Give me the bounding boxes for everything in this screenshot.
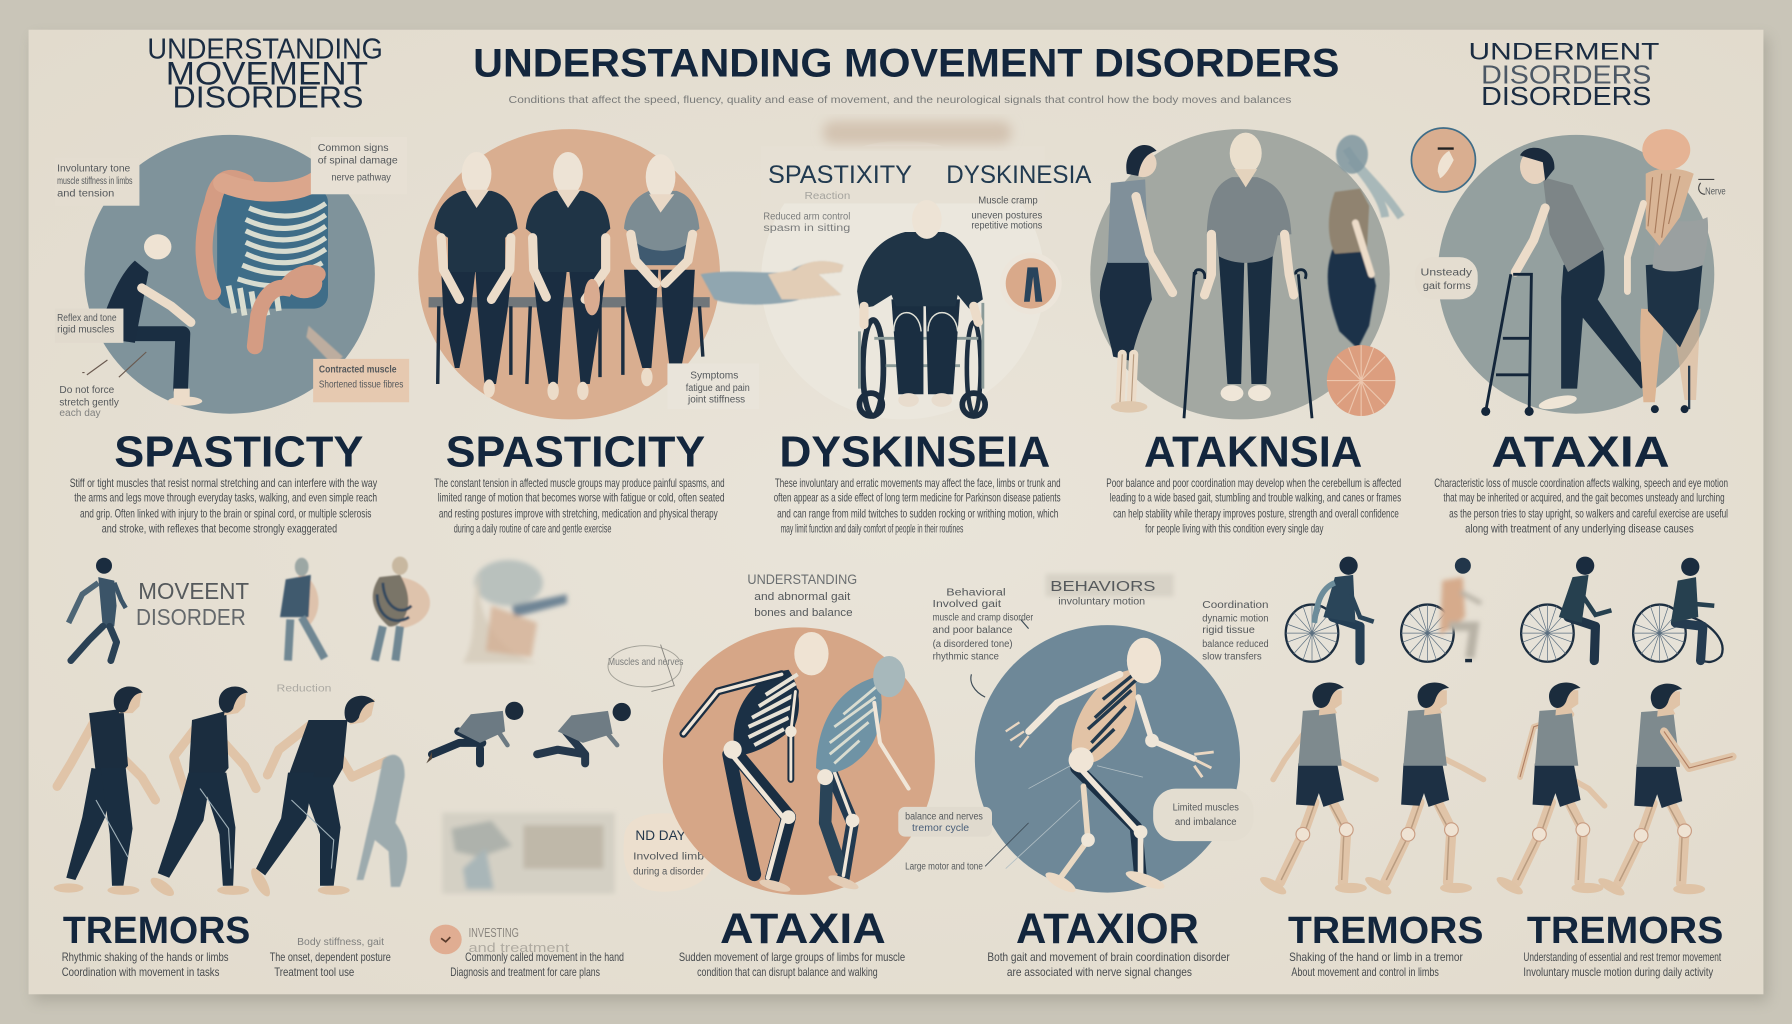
text: ataxior description: Both gait and movement of brain coordination disorder <box>987 950 1230 964</box>
callout: no day: Involved limb <box>633 851 704 862</box>
text: third description <box>450 950 624 979</box>
panel: walker circle <box>1438 129 1714 416</box>
note block: behaviours left: muscle and cramp disorder <box>933 613 1034 624</box>
figure: center person with canes <box>1184 133 1312 418</box>
small faded caption: Reduction <box>277 683 332 694</box>
text: understanding callout: and abnormal gait <box>754 591 851 603</box>
heading: spastixity: SPASTIXITY <box>768 161 912 189</box>
row one headings: ATAKNSIA <box>1144 428 1362 476</box>
subtitle line: Conditions that affect the speed, fluency, quality and ease of movement, and the neurological signals that control how the body moves and balances <box>509 95 1291 106</box>
row one headings: ATAXIA <box>1491 428 1670 476</box>
figure: faded right person <box>1328 135 1401 349</box>
text: tremors second description: Shaking of the hand or limb in a tremor <box>1289 950 1463 964</box>
row two heading: ataxior: ATAXIOR <box>1016 905 1199 952</box>
row one headings: SPASTICTY <box>114 428 363 476</box>
note block: behaviours left: (a disordered tone) <box>933 639 1013 650</box>
note block: behaviours centre <box>1046 574 1174 608</box>
text: ataxia lower description: Sudden movement of large groups of limbs for muscle <box>679 950 905 964</box>
figure: runner one <box>54 686 155 895</box>
callout: upper left label: and tension <box>57 189 115 200</box>
text: dyskinesia description <box>774 476 1061 536</box>
main title: UNDERSTANDING MOVEMENT DISORDERS <box>473 42 1339 86</box>
callout: skeleton left pill: balance and nerves <box>905 811 983 822</box>
callout: skeleton left pill <box>898 807 992 837</box>
note: skeleton lower left <box>905 823 1029 873</box>
text: understanding callout: UNDERSTANDING <box>747 572 857 587</box>
panel: skeleton circle slate <box>975 625 1240 896</box>
row two heading: tremors third: TREMORS <box>1527 909 1723 951</box>
callout: seated group note: fatigue and pain <box>686 383 750 394</box>
callout: pill label: gait forms <box>1423 281 1471 292</box>
text: tremors second description: About movement and control in limbs <box>1291 965 1439 979</box>
note: skeleton lower left: Large motor and tone <box>905 862 983 873</box>
note block: behaviours right: balance reduced <box>1202 639 1269 650</box>
callout: peach note: Contracted muscle <box>319 365 397 376</box>
figure: seated person two <box>526 152 610 400</box>
note right: repetitive motions <box>971 221 1042 232</box>
callout: skeleton right pill <box>1153 789 1254 841</box>
callout: no day: ND DAY <box>635 828 686 843</box>
row two heading: tremors: TREMORS <box>63 909 250 951</box>
figure: walker three <box>1494 682 1605 898</box>
figure: wheel person two <box>1401 558 1481 662</box>
callout: upper right label: of spinal damage <box>318 155 398 166</box>
callout: upper right label <box>311 137 407 194</box>
row one headings: SPASTICITY <box>446 428 705 476</box>
note block: behaviours left: Behavioral <box>946 587 1006 598</box>
text: understanding callout: bones and balance <box>754 607 853 619</box>
top right heading: DISORDERS <box>1481 59 1651 89</box>
text: middle description: Treatment tool use <box>274 965 355 979</box>
note right: uneven postures <box>971 210 1042 221</box>
text: ataksia description: Poor balance and poor coordination may develop when the cerebellum is affected <box>1106 476 1401 490</box>
text: ataxior description: are associated with nerve signal changes <box>1007 965 1192 979</box>
text: ataxia lower description: condition that can disrupt balance and walking <box>697 965 878 979</box>
faded small hand icon <box>306 326 343 366</box>
note block: behaviours left <box>933 587 1034 697</box>
top right heading: DISORDERS <box>1481 81 1651 111</box>
callout: seated group note: joint stiffness <box>687 394 745 405</box>
icon: small circle inset <box>1411 128 1475 192</box>
panel: cane circle <box>1090 129 1401 419</box>
callout: arc note <box>608 645 683 691</box>
callout: upper right label: nerve pathway <box>331 173 392 184</box>
text: tremors description: Coordination with movement in tasks <box>62 965 219 979</box>
faded pill decoration <box>823 121 1011 144</box>
text: spasticity description two: limited range of motion that becomes worse with fatigue or cold, often seated <box>438 491 725 505</box>
bench <box>429 297 710 384</box>
text: tremors third description: Involuntary muscle motion during daily activity <box>1523 965 1713 979</box>
text: spasticity description two <box>434 476 725 536</box>
text: ataksia description: for people living with this condition every single day <box>1145 522 1323 536</box>
icon: peach striped disc <box>1327 345 1395 416</box>
figure: runner three <box>248 696 386 899</box>
callout: no day <box>623 813 714 892</box>
note block: behaviours right: slow transfers <box>1202 651 1262 662</box>
anatomy: intestines and ribs <box>204 178 328 346</box>
callout: lower left label: each day <box>59 408 101 419</box>
text: spasticity description two: during a daily routine of care and gentle exercise <box>454 522 612 536</box>
callout: upper left label <box>55 158 139 206</box>
text: moveent disorder: DISORDER <box>136 604 246 630</box>
note block: behaviours right <box>1202 600 1269 662</box>
callout: seated group note <box>667 363 759 409</box>
row two heading: ataxia: ATAXIA <box>720 905 886 952</box>
text: spasticity description one: Stiff or tight muscles that resist normal stretching and can interfere with the way <box>70 476 377 490</box>
figure: side view left person <box>1100 145 1173 413</box>
text: spasticity description one <box>70 476 377 536</box>
text: ataxia description: along with treatment of any underlying disease causes <box>1465 522 1694 536</box>
text: ataxia lower description <box>679 950 905 979</box>
note block: behaviours left: rhythmic stance <box>933 651 999 662</box>
top left heading: DISORDERS <box>173 79 363 114</box>
figure: wheel person four <box>1633 558 1723 662</box>
text: spasticity description one: and stroke, with reflexes that become strongly exaggerated <box>102 522 337 536</box>
text: dyskinesia description: and can range from mild twitches to sudden rocking or writhing motion, which <box>777 507 1058 521</box>
text: third description: Commonly called movement in the hand <box>465 950 624 964</box>
text: spasticity description two: and resting postures improve with stretching, medication and physical therapy <box>439 507 718 521</box>
text: spasticity description one: and grip. Often linked with injury to the brain or spinal cord, or multiple sclerosis <box>80 507 371 521</box>
callout: peach note: Shortened tissue fibres <box>319 379 403 390</box>
text: middle description: Body stiffness, gait <box>297 937 384 948</box>
figure: person in wheelchair <box>857 200 985 416</box>
callout: pill label <box>1415 257 1478 299</box>
top left heading <box>147 33 383 114</box>
figure: crouching person two <box>537 703 631 763</box>
text: ataksia description <box>1106 476 1401 536</box>
text: tremors description <box>62 950 229 979</box>
note left: Reaction <box>805 191 851 202</box>
callout: upper left label: Involuntary tone <box>57 163 131 174</box>
figure: gray person <box>357 755 407 887</box>
text: ataxior description <box>987 950 1230 979</box>
figure: faded person one <box>280 558 325 661</box>
text: tremors second description <box>1289 950 1463 979</box>
text: understanding callout <box>747 572 857 619</box>
note block: behaviours centre: BEHAVIORS <box>1050 579 1156 595</box>
small note: Nerve <box>1705 186 1726 197</box>
figure: seated person three <box>624 154 699 386</box>
text: dyskinesia description: may limit function and daily comfort of people in their routines <box>781 522 963 536</box>
figure: skeleton two <box>816 656 909 892</box>
figure: bent man with walker <box>1481 148 1653 416</box>
text: ataxia description <box>1434 476 1728 536</box>
callout: skeleton right pill: and imbalance <box>1175 817 1237 828</box>
row one headings <box>114 428 1670 476</box>
icon: reaching arm <box>701 261 843 305</box>
small note <box>1698 179 1726 197</box>
note block: behaviours right: dynamic motion <box>1202 614 1269 625</box>
icon: small peach dot with label <box>430 925 570 955</box>
figure: walker four <box>1596 684 1733 899</box>
panel: seated group circle <box>418 129 720 419</box>
note block: behaviours centre: involuntary motion <box>1058 597 1145 608</box>
callout: lower left label <box>59 352 146 419</box>
text: moveent disorder <box>136 578 249 630</box>
figure: blurred bent figure <box>463 560 567 663</box>
note right <box>971 195 1042 232</box>
top right heading: UNDERMENT <box>1469 38 1660 65</box>
panel: skeleton circle peach <box>663 627 935 895</box>
note block: behaviours right: rigid tissue <box>1202 625 1255 636</box>
text: dyskinesia description: often appear as a side effect of long term medicine for Parkinson disease patients <box>774 491 1061 505</box>
text: moveent disorder: MOVEENT <box>138 578 249 604</box>
callout: arc note: Muscles and nerves <box>608 657 683 668</box>
callout: upper left label: muscle stiffness in limbs <box>57 176 133 187</box>
panel: spasticity anatomy circle <box>85 135 375 414</box>
callout: peach note <box>313 359 409 402</box>
text: third description: Diagnosis and treatment for care plans <box>450 965 600 979</box>
figure: seated person one <box>434 152 518 398</box>
figure: crouching person one <box>426 702 523 763</box>
figure: faded person two <box>373 557 430 661</box>
callout: upper right label: Common signs <box>318 143 389 154</box>
callout: skeleton left pill: tremor cycle <box>912 823 969 834</box>
callout: lower left label: Do not force <box>59 385 115 396</box>
text: spasticity description two: The constant tension in affected muscle groups may produce painful spasms, and <box>434 476 725 490</box>
callout: skeleton right pill: Limited muscles <box>1173 802 1239 813</box>
callout: seated group note: Symptoms <box>690 370 738 381</box>
figure: walker two <box>1363 682 1483 898</box>
figure: runner two <box>148 686 256 899</box>
text: ataksia description: can help stability while therapy improves posture, strength and overall confidence <box>1113 507 1399 521</box>
figure: seated bent person <box>97 234 202 406</box>
text: tremors description: Rhythmic shaking of the hands or limbs <box>62 950 229 964</box>
note block: behaviours left: Involved gait <box>933 599 1001 610</box>
note block: behaviours right: Coordination <box>1202 600 1269 611</box>
text: ataksia description: leading to a wide based gait, stumbling and trouble walking, and canes or frames <box>1110 491 1401 505</box>
callout: left middle label: rigid muscles <box>57 325 114 336</box>
icon: small peach dot with label: INVESTING <box>469 926 519 940</box>
figure: wheel person three <box>1521 557 1611 662</box>
text: tremors third description <box>1523 950 1722 979</box>
top left heading: MOVEMENT <box>166 56 368 92</box>
note right: Muscle cramp <box>978 195 1038 206</box>
callout: left middle label: Reflex and tone <box>57 313 117 324</box>
icon: small peach circle <box>1000 253 1062 314</box>
text: spasticity description one: the arms and legs move through everyday tasks, walking, and even simple reach <box>74 491 377 505</box>
heading: dyskinesia: DYSKINESIA <box>946 161 1092 189</box>
icon: small peach dot with label: and treatment <box>469 941 570 955</box>
text: dyskinesia description: These involuntary and erratic movements may affect the face, limbs or trunk and <box>775 476 1061 490</box>
figure: wheel person one <box>1286 557 1374 662</box>
note left: spasm in sitting <box>763 223 851 234</box>
top right heading <box>1469 38 1660 111</box>
top left heading: UNDERSTANDING <box>147 33 383 65</box>
note block: behaviours left: and poor balance <box>933 625 1013 636</box>
callout: lower left label: stretch gently <box>59 398 120 409</box>
figure: small dark silhouette <box>69 558 126 661</box>
note left <box>763 191 851 234</box>
figure: walker one <box>1258 682 1376 898</box>
text: middle description: The onset, dependent posture <box>270 950 391 964</box>
figure: right anatomical person <box>1627 129 1708 413</box>
faded image panel <box>442 813 615 894</box>
row one headings: DYSKINSEIA <box>779 428 1050 476</box>
callout: no day: during a disorder <box>633 866 705 877</box>
figure: skeleton leaning <box>1006 638 1214 896</box>
row two heading: tremors second: TREMORS <box>1288 909 1483 951</box>
callout: pill label: Unsteady <box>1421 267 1473 278</box>
text: middle description <box>270 937 391 979</box>
callout: left middle label <box>55 309 123 343</box>
note left: Reduced arm control <box>763 211 850 222</box>
panel: wheelchair circle <box>701 121 1092 419</box>
figure: skeleton one <box>683 632 829 894</box>
